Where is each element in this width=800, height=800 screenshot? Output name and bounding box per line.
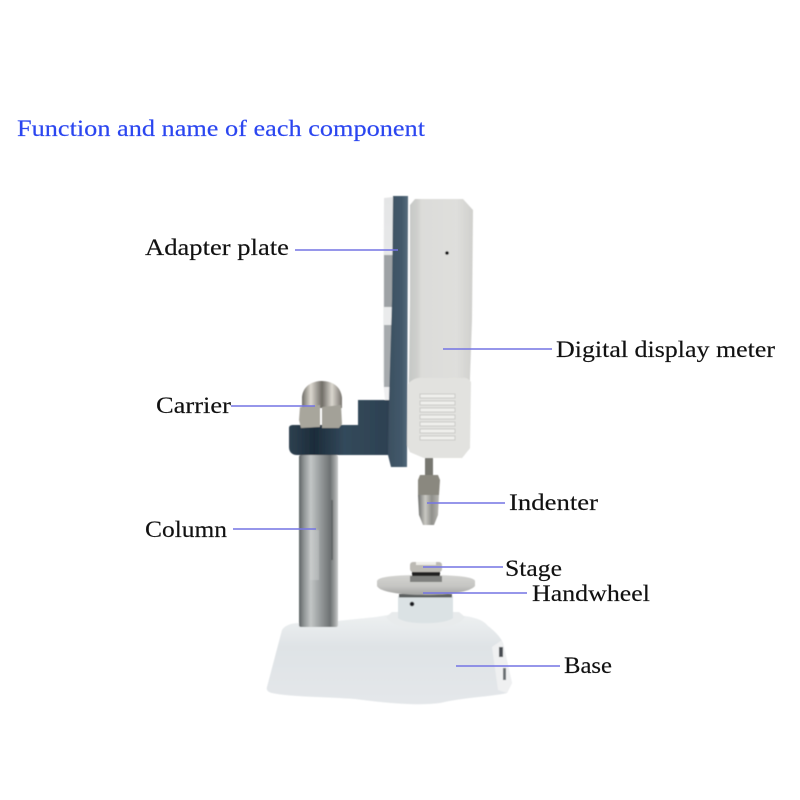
digital display meter (407, 199, 473, 458)
leader lines (231, 250, 560, 666)
label: base: Base (564, 653, 612, 678)
label: stage: Stage (505, 556, 562, 581)
cap nut (299, 381, 342, 428)
label: column: Column (145, 517, 228, 542)
back of meter (383, 197, 393, 400)
column (299, 455, 338, 627)
carrier bracket (289, 400, 390, 455)
indenter (418, 458, 440, 525)
adapter plate (388, 196, 408, 467)
label: adapter plate: Adapter plate (145, 235, 289, 260)
label: digital display meter: Digital display meter (556, 337, 775, 362)
vent grille (420, 394, 455, 440)
base (267, 612, 512, 704)
stage (410, 562, 442, 582)
label: carrier: Carrier (156, 393, 231, 418)
display panels (384, 255, 393, 307)
title: Function and name of each component (17, 116, 426, 141)
label: handwheel: Handwheel (532, 581, 650, 606)
handwheel and neck (377, 575, 475, 623)
instrument photo illustration (267, 196, 512, 704)
label: indenter: Indenter (509, 490, 598, 515)
